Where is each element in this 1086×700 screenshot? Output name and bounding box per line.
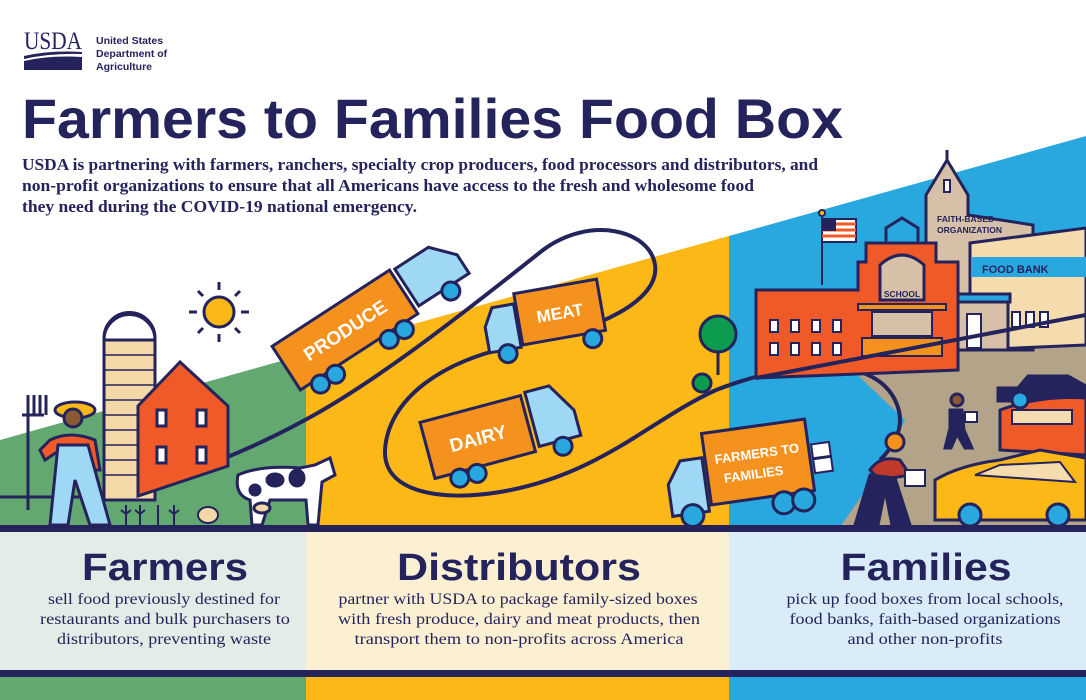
food bank <box>958 228 1086 350</box>
fence <box>0 496 110 498</box>
truck: dairy: DAIRY <box>447 422 510 457</box>
bottom color strips <box>0 677 1086 700</box>
silo <box>104 313 155 500</box>
panel: distributors <box>306 532 729 670</box>
panel: farmers: restaurants and bulk purchasers to <box>40 611 290 628</box>
subtitle: USDA is partnering with farmers, ranchers, specialty crop producers, food processors and distributors, and <box>22 155 819 174</box>
panel: distributors: with fresh produce, dairy and meat products, then <box>338 611 700 628</box>
truck: produce <box>272 235 481 403</box>
panel: distributors: partner with USDA to package family-sized boxes <box>338 591 698 608</box>
cars <box>935 376 1086 526</box>
school <box>756 218 958 378</box>
panel: families: and other non-profits <box>848 631 1002 648</box>
usda logo: Department of <box>96 48 168 60</box>
illustration background bands <box>0 136 1086 527</box>
truck: produce: PRODUCE <box>300 297 391 366</box>
bottom bar <box>0 670 1086 677</box>
panel: farmers <box>0 532 306 670</box>
panel: farmers: distributors, preventing waste <box>57 631 271 648</box>
usda logo: United States <box>96 35 163 47</box>
truck: farmers to families: FARMERS TO <box>714 440 800 467</box>
cow <box>237 458 335 525</box>
trees <box>693 316 736 392</box>
usda logo: USDA <box>24 28 82 55</box>
farmer <box>22 395 110 525</box>
usda logo <box>24 28 168 73</box>
barn <box>138 362 228 496</box>
panel: farmers: sell food previously destined for <box>48 591 281 608</box>
panel: families <box>729 532 1086 670</box>
panel: families: pick up food boxes from local schools, <box>786 591 1064 608</box>
subtitle <box>22 155 819 216</box>
school: SCHOOL <box>884 289 920 299</box>
truck: farmers to families: FAMILIES <box>723 463 785 486</box>
truck: meat <box>480 279 608 366</box>
truck: dairy <box>419 381 586 493</box>
food bank: FOOD BANK <box>982 264 1049 276</box>
church: faith-based organization <box>926 150 1033 350</box>
hill line <box>756 315 1086 378</box>
title: Farmers to Families Food Box <box>22 87 843 150</box>
people <box>855 394 977 525</box>
sun <box>189 282 249 342</box>
usda logo: Agriculture <box>96 61 152 73</box>
flag <box>819 210 856 285</box>
subtitle: they need during the COVID-19 national emergency. <box>22 197 417 216</box>
base line <box>0 525 1086 532</box>
panel: distributors: Distributors <box>397 547 641 589</box>
truck: meat: MEAT <box>535 300 585 327</box>
panel: families: food banks, faith-based organizations <box>790 611 1060 628</box>
subtitle: non-profit organizations to ensure that all Americans have access to the fresh and wholesome food <box>22 176 755 195</box>
panel: farmers: Farmers <box>82 547 248 589</box>
road curve <box>95 230 900 497</box>
truck: farmers to families <box>662 416 838 529</box>
panel: distributors: transport them to non-profits across America <box>354 631 684 648</box>
church: faith-based organization: FAITH-BASED <box>937 214 994 224</box>
church: faith-based organization: ORGANIZATION <box>937 225 1002 235</box>
wheat and chick <box>121 505 218 525</box>
panel: families: Families <box>840 547 1012 589</box>
